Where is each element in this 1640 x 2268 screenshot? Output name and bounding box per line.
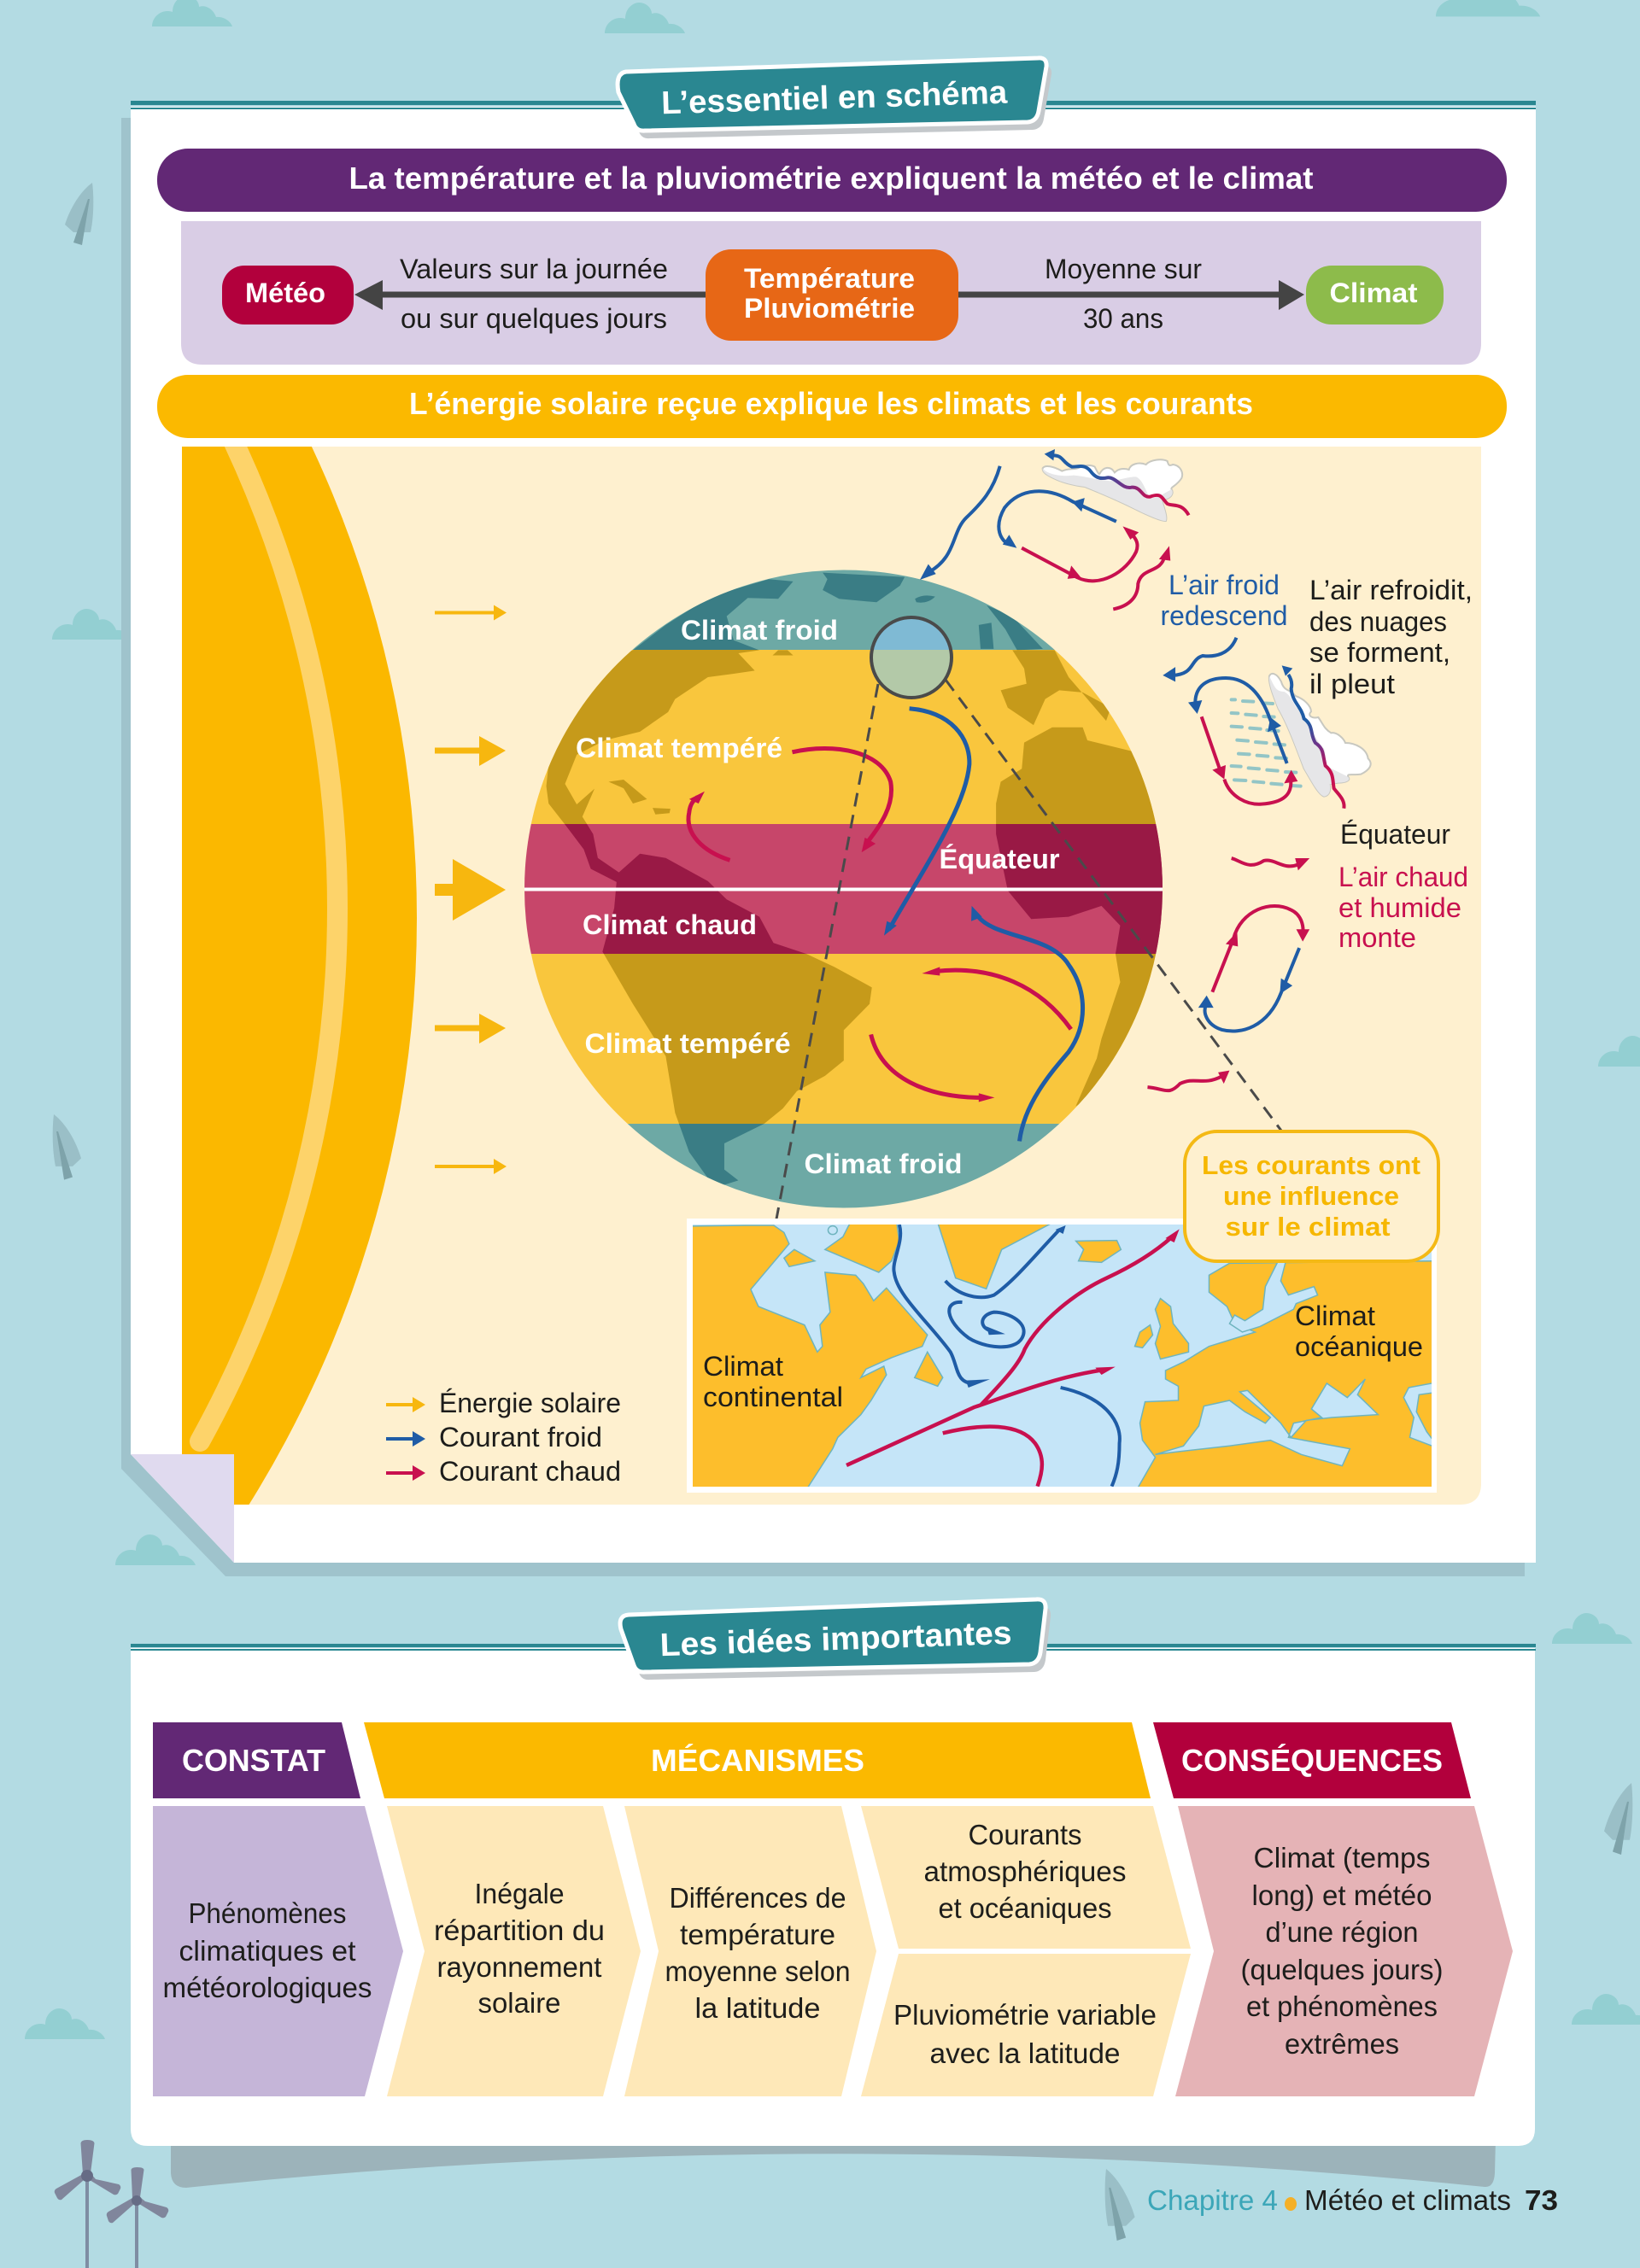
bottom card shadow (171, 2139, 1496, 2188)
label: l'air froid redescend: L’air froid (1168, 570, 1280, 600)
card body (131, 107, 1536, 1563)
box: pluviométrie variable: Pluviométrie variable (893, 1999, 1157, 2031)
title tab: l'essentiel en schéma (618, 58, 1051, 138)
box: différences de température: Différences de (670, 1882, 846, 1914)
map currents (893, 1225, 1120, 1487)
card shadow (121, 118, 1525, 1576)
box: courants (861, 1806, 1191, 1949)
atmospheric circulation diagrams (920, 466, 1309, 1090)
box: inégale répartition: répartition du (434, 1914, 605, 1946)
box: météo: Météo (245, 278, 325, 308)
label: moyenne sur 30 ans: 30 ans (1083, 303, 1163, 334)
box: conséquences: (quelques jours) (1240, 1954, 1444, 1985)
label: équateur: Équateur (1340, 819, 1450, 850)
box: conséquences (1175, 1806, 1513, 2096)
label: l'air chaud et humide monte (1338, 862, 1468, 953)
legend (386, 1388, 621, 1487)
rain (1232, 699, 1301, 786)
globe labels: Climat tempéré (576, 733, 782, 763)
heading bar: énergie solaire (157, 375, 1507, 438)
label: moyenne sur 30 ans: Moyenne sur (1045, 254, 1202, 284)
box: conséquences: long) et météo (1252, 1879, 1432, 1911)
label: l'air froid redescend: redescend (1160, 600, 1288, 631)
box: différences de température (624, 1806, 876, 2096)
box: inégale répartition (387, 1806, 641, 2096)
box: phénomènes: Phénomènes (188, 1897, 347, 1929)
box: inégale répartition: solaire (478, 1987, 560, 2019)
label: moyenne sur 30 ans (1045, 254, 1202, 334)
box: pluviométrie variable: avec la latitude (929, 2037, 1121, 2069)
box: température pluviométrie (706, 249, 958, 341)
blue air currents (928, 466, 1299, 1032)
cloud middle with rain (1188, 665, 1371, 809)
label: l'air refroidit: L’air refroidit, (1309, 575, 1473, 605)
box: météo (222, 266, 354, 324)
header: mécanismes: MÉCANISMES (651, 1743, 864, 1778)
header rule (131, 101, 1536, 109)
box: conséquences: extrêmes (1285, 2028, 1399, 2060)
globe currents (688, 709, 1083, 1141)
map labels: Climat (1295, 1301, 1375, 1331)
icon: footer tree (1105, 2169, 1135, 2241)
label: valeurs sur la journée: ou sur quelques jours (401, 303, 667, 334)
label: valeurs sur la journée (400, 254, 668, 334)
footer: chapter and page number: Météo et climats (1304, 2184, 1511, 2216)
header: mécanismes (364, 1722, 1151, 1798)
box: température pluviométrie: Température (744, 263, 915, 294)
globe labels: Climat froid (681, 615, 838, 646)
red air currents (1022, 532, 1303, 1090)
label: l'air froid redescend (1160, 570, 1288, 631)
title tab: les idées importantes (620, 1599, 1051, 1680)
box: climat (1306, 266, 1444, 324)
box: conséquences: Climat (temps (1254, 1842, 1430, 1873)
title tab: l'essentiel en schéma: L’essentiel en schéma (661, 75, 1009, 121)
box: différences de température: moyenne selon (665, 1955, 851, 1987)
header rule (131, 1644, 1536, 1651)
title tab: les idées importantes: Les idées importantes (659, 1616, 1012, 1663)
footer: chapter and page number: 73 (1525, 2184, 1558, 2216)
callout: les courants ont une influence: une influence (1223, 1181, 1399, 1211)
box: phénomènes: météorologiques (162, 1972, 372, 2003)
label: l'air chaud et humide monte: et humide (1338, 892, 1461, 923)
arrow to climat (955, 280, 1304, 310)
globe magnifier circle (871, 617, 952, 698)
heading bar: température et pluviométrie (157, 149, 1507, 212)
header: constat (153, 1722, 360, 1798)
map: north atlantic currents (687, 1219, 1439, 1493)
box: courants: et océaniques (938, 1892, 1112, 1924)
map labels: océanique (1295, 1331, 1423, 1362)
callout: les courants ont une influence: Les courants ont (1202, 1150, 1420, 1180)
label: l'air refroidit: se forment, (1309, 637, 1450, 668)
label: l'air refroidit (1309, 575, 1473, 699)
globe labels: Climat froid (805, 1149, 962, 1179)
footer: chapter and page number (1147, 2184, 1558, 2216)
label: l'air chaud et humide monte: monte (1338, 922, 1416, 953)
map labels: continental (703, 1382, 843, 1412)
heading bar: température et pluviométrie: La température et la pluviométrie expliquent la météo et le climat (348, 161, 1314, 196)
box: inégale répartition: Inégale (475, 1878, 564, 1909)
callout: les courants ont une influence: sur le climat (1225, 1212, 1391, 1242)
air current arrowheads (920, 498, 1292, 1008)
header: conséquences (1153, 1722, 1471, 1798)
arrow to météo (354, 280, 709, 310)
header: conséquences: CONSÉQUENCES (1181, 1743, 1443, 1778)
icon: windmills (55, 2140, 168, 2268)
box: pluviométrie variable (861, 1954, 1191, 2096)
globe labels: Climat tempéré (584, 1028, 791, 1059)
box: phénomènes (153, 1806, 403, 2096)
dashed lines to map and callout (775, 680, 1281, 1228)
map labels: Climat (703, 1351, 783, 1382)
globe (512, 564, 1281, 1228)
box: différences de température: température (680, 1919, 835, 1950)
legend: énergie solaire: Énergie solaire (439, 1388, 621, 1418)
page fold corner (131, 1454, 234, 1563)
footer: chapter and page number: Chapitre 4 (1147, 2184, 1278, 2216)
label: l'air refroidit: des nuages (1309, 606, 1447, 637)
panel: les idées importantes card (131, 1599, 1536, 2146)
panel: météo et climat flow (181, 221, 1481, 365)
heading bar: énergie solaire: L’énergie solaire reçue explique les climats et les courants (409, 386, 1253, 421)
box: climat: Climat (1329, 278, 1418, 308)
globe labels: Climat chaud (583, 909, 757, 940)
label: l'air chaud et humide monte: L’air chaud (1338, 862, 1468, 892)
legend: courant chaud: Courant chaud (439, 1456, 621, 1487)
box: différences de température: la latitude (695, 1992, 820, 2024)
box: inégale répartition: rayonnement (437, 1951, 601, 1983)
box: température pluviométrie: Pluviométrie (744, 293, 915, 324)
label: l'air refroidit: il pleut (1309, 669, 1395, 699)
label: valeurs sur la journée: Valeurs sur la journée (400, 254, 668, 284)
globe labels: Équateur (940, 844, 1059, 874)
solar rays arrows (435, 605, 507, 1174)
box: conséquences: d’une région (1266, 1916, 1418, 1948)
box: phénomènes: climatiques et (179, 1935, 355, 1967)
panel: schema background (182, 447, 1481, 1505)
callout: les courants ont une influence (1185, 1131, 1438, 1261)
map labels (703, 1301, 1423, 1412)
cloud top (1043, 449, 1189, 521)
box: conséquences: et phénomènes (1246, 1990, 1438, 2022)
legend: courant froid: Courant froid (439, 1422, 602, 1453)
box: courants: Courants (969, 1819, 1081, 1850)
header: constat: CONSTAT (182, 1743, 325, 1778)
sun (182, 447, 417, 1505)
globe labels (576, 615, 1059, 1179)
box: courants: atmosphériques (924, 1856, 1126, 1887)
